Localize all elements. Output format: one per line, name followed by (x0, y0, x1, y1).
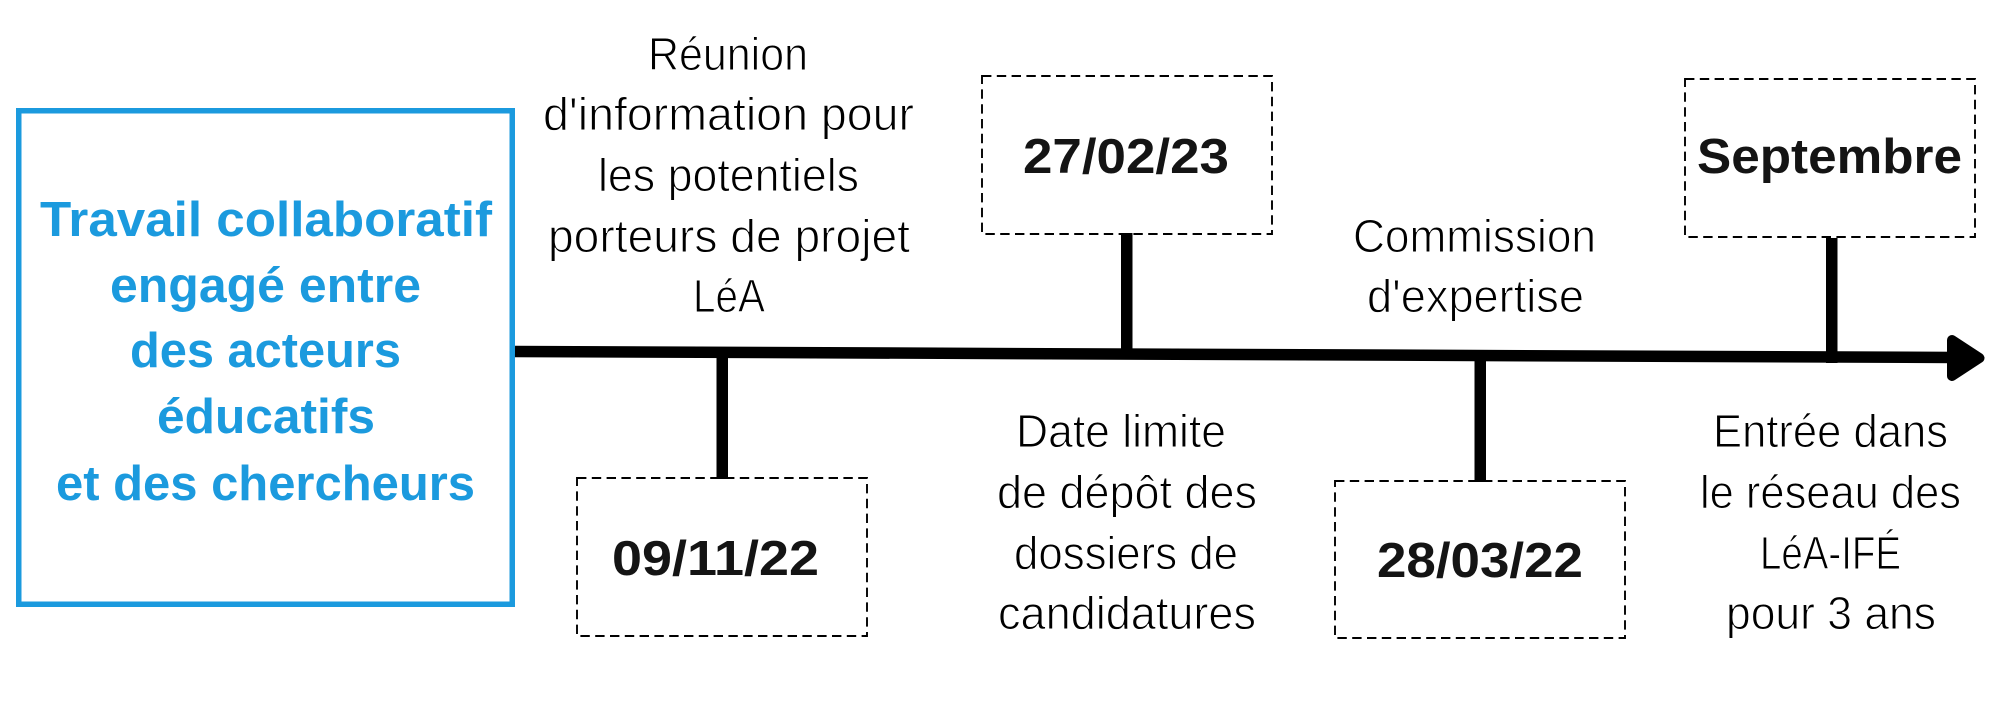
text block: submission deadline: dossiers de (1014, 527, 1238, 579)
text block: information meeting: Réunion (648, 28, 808, 80)
date box: 27/02/23: 27/02/23 (1023, 130, 1229, 184)
text block: expert commission: d'expertise (1367, 270, 1584, 322)
milestone tick: 09/11/22 (716, 352, 728, 479)
date box: 27/02/23 (982, 76, 1272, 234)
heading: collaborative work text: et des chercheurs (56, 457, 475, 511)
milestone tick: Septembre (1826, 238, 1838, 363)
text block: network entry: pour 3 ans (1726, 587, 1936, 639)
date box: Septembre: Septembre (1697, 130, 1962, 184)
date box: 09/11/22 (577, 478, 867, 636)
text block: network entry: Entrée dans (1713, 405, 1948, 457)
heading: collaborative work text: engagé entre (110, 259, 421, 313)
panel: collaborative work box (19, 111, 512, 604)
text block: information meeting: porteurs de projet (548, 210, 910, 262)
heading: collaborative work text: Travail collaboratif (40, 193, 493, 247)
text block: submission deadline: de dépôt des (997, 466, 1257, 518)
text block: expert commission: Commission (1353, 210, 1596, 262)
text block: submission deadline (997, 405, 1257, 639)
arrow: timeline axis (515, 340, 1980, 376)
date box: 09/11/22: 09/11/22 (612, 532, 819, 586)
milestone tick: 28/03/22 (1474, 355, 1486, 482)
date box: 28/03/22 (1335, 481, 1625, 638)
text block: network entry: le réseau des (1700, 466, 1961, 518)
text block: information meeting: les potentiels (598, 149, 859, 201)
text block: network entry (1700, 405, 1961, 639)
text block: submission deadline: candidatures (998, 587, 1256, 639)
heading: collaborative work text: des acteurs (130, 324, 401, 378)
text block: submission deadline: Date limite (1016, 405, 1226, 457)
milestone tick: 27/02/23 (1121, 233, 1132, 355)
text block: information meeting: d'information pour (543, 88, 914, 140)
text block: network entry: LéA-IFÉ (1760, 527, 1901, 579)
heading: collaborative work text: éducatifs (157, 390, 375, 444)
heading: collaborative work text (40, 193, 493, 511)
date box: 28/03/22: 28/03/22 (1377, 534, 1583, 588)
text block: expert commission (1353, 210, 1596, 322)
date box: Septembre (1685, 79, 1975, 237)
text block: information meeting: LéA (693, 270, 765, 322)
text block: information meeting (543, 28, 914, 322)
